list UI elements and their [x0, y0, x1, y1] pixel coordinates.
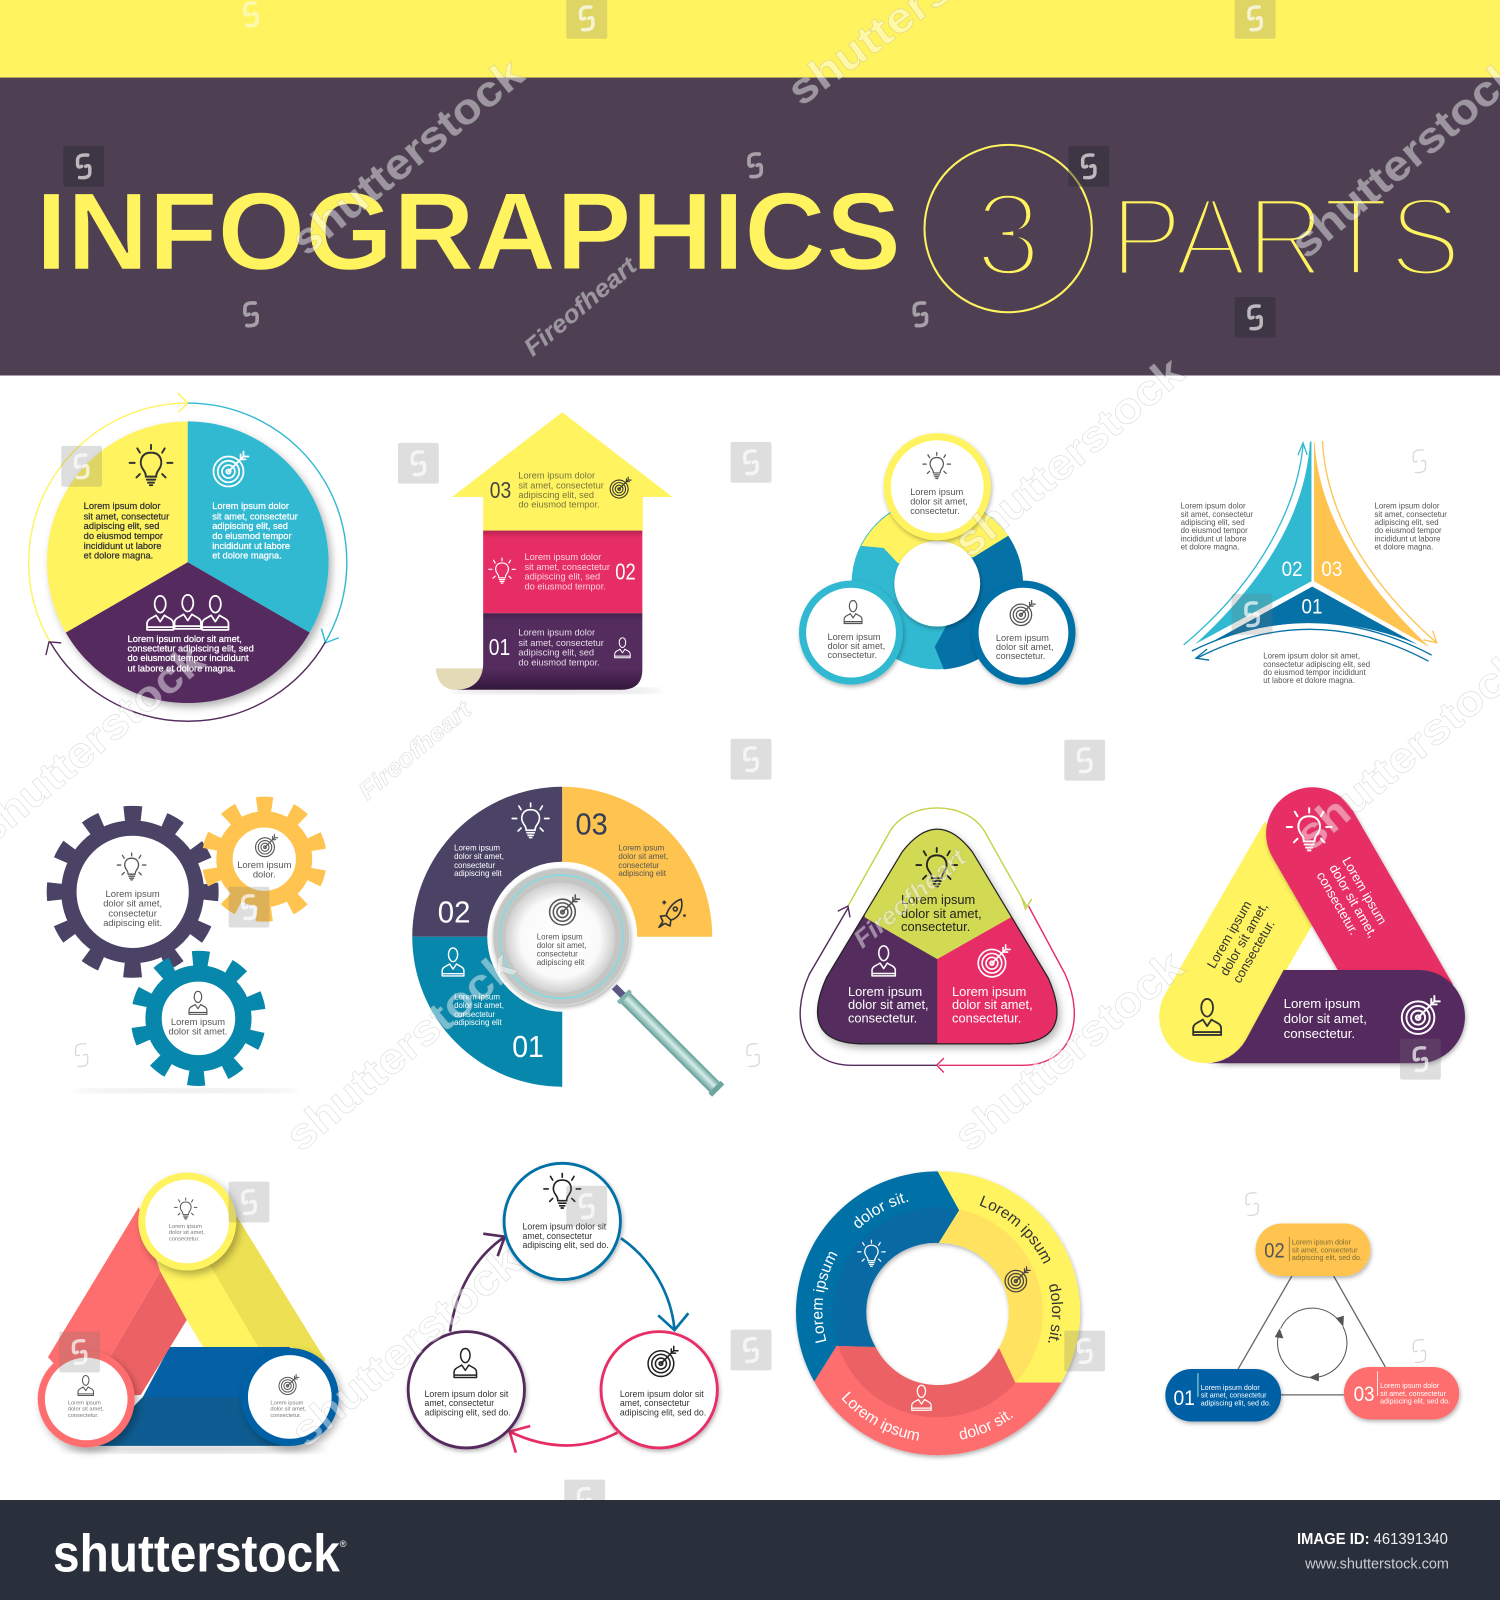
icon: bulb — [923, 453, 951, 478]
panel: cycle of outlined circles — [408, 1163, 717, 1453]
circle: purple: amet, consectetur — [424, 1398, 494, 1408]
text: red: Lorem ipsum — [952, 984, 1026, 999]
outer arrows — [800, 808, 1074, 1072]
text: segment 03: adipiscing elit, sed — [518, 490, 594, 500]
image id: IMAGE ID: 461391340 — [1297, 1531, 1448, 1548]
text: segment 02: sit amet, consectetur — [524, 562, 610, 572]
number 03: 03 — [490, 477, 511, 503]
text: purple: Lorem ipsum — [848, 984, 922, 999]
inner darker band — [834, 1208, 1043, 1418]
text: right: incididunt ut labore — [1374, 534, 1441, 543]
number 02: 02 — [615, 559, 636, 585]
number 01: 01 — [512, 1030, 544, 1064]
ring segments — [852, 498, 1023, 669]
curved labels: Lorem ipsum — [813, 1252, 838, 1344]
icon: person — [442, 948, 464, 976]
gear: dark: adipiscing elit. — [103, 918, 162, 928]
text: segment 02: Lorem ipsum dolor — [524, 552, 601, 562]
text: lens: adipiscing elit — [537, 958, 585, 967]
arrow: blue — [621, 1238, 688, 1330]
cycle arrows — [1276, 1308, 1347, 1381]
pill 02: sit amet, consectetur — [1292, 1247, 1358, 1255]
curved labels: Lorem ipsum — [842, 1392, 919, 1441]
panel: paper arrow — [436, 412, 672, 694]
pill 03: sit amet, consectetur — [1380, 1390, 1446, 1398]
icon: person — [872, 946, 895, 976]
panel: three-point star — [1181, 441, 1447, 685]
band: red — [1266, 787, 1453, 985]
text: yellow slice: et dolore magna. — [84, 551, 153, 561]
circle: purple: adipiscing elit, sed do. — [424, 1407, 511, 1417]
yellow top band — [0, 0, 1500, 78]
text: purple slice: ut labore et dolore magna. — [128, 663, 236, 673]
text: left: et dolore magna. — [1181, 542, 1239, 551]
text: segment 02: adipiscing elit, sed — [524, 572, 600, 582]
text: cyan slice: adipiscing elit, sed — [212, 521, 288, 531]
text: teal quadrant: adipiscing elit — [454, 1018, 503, 1027]
circle: top: consectetur. — [169, 1236, 200, 1242]
circle: purple — [408, 1332, 524, 1448]
text: segment 03: Lorem ipsum dolor — [518, 471, 595, 481]
gear: dark: Lorem ipsum — [106, 889, 160, 899]
icon: person — [454, 1348, 477, 1377]
icon: bulb — [512, 803, 549, 838]
text: cyan slice: incididunt ut labore — [212, 541, 290, 551]
text: cyan slice: et dolore magna. — [212, 551, 282, 561]
gear: dark: consectetur — [108, 908, 157, 918]
text: yellow band: consectetur. — [1230, 917, 1278, 986]
handle — [608, 981, 724, 1097]
text: segment 01: adipiscing elit, sed — [518, 648, 594, 658]
circle: blue: Lorem ipsum — [996, 633, 1049, 643]
text: purple band: dolor sit amet, — [1284, 1011, 1367, 1026]
icon: person — [78, 1376, 93, 1396]
circle: left: consectetur. — [68, 1413, 99, 1419]
icon: target — [978, 945, 1010, 977]
text: red: consectetur. — [952, 1010, 1021, 1025]
text: green: consectetur. — [901, 919, 970, 934]
connector lines — [1238, 1276, 1385, 1395]
circle: red: amet, consectetur — [620, 1398, 690, 1408]
panel: gears — [54, 790, 334, 1096]
text: cyan slice: Lorem ipsum dolor — [212, 501, 289, 511]
lens — [493, 868, 630, 1005]
text: left: adipiscing elit, sed — [1181, 518, 1245, 527]
curved labels — [813, 1193, 1064, 1441]
icon: bulb — [130, 445, 172, 485]
gear: teal: dolor sit amet. — [169, 1027, 227, 1037]
text: purple slice: do eiusmod tempor incididunt — [128, 653, 249, 663]
star segments — [1190, 441, 1435, 653]
panel: pie chart with circular arrows — [29, 393, 347, 721]
panel: linked band triangle — [1159, 787, 1465, 1063]
circle: red: adipiscing elit, sed do. — [620, 1407, 706, 1417]
icon: target — [1010, 601, 1035, 626]
segment 02 — [483, 531, 642, 613]
stock watermark text: Fireofheart — [519, 252, 643, 362]
text: purple slice: Lorem ipsum dolor sit amet, — [128, 634, 242, 644]
website: www.shutterstock.com — [1304, 1556, 1449, 1572]
circle: yellow — [887, 437, 987, 537]
text: teal quadrant: Lorem ipsum — [454, 992, 500, 1001]
stock watermark text: shutterstock — [282, 1237, 530, 1457]
circle: blue — [975, 584, 1072, 681]
pill 02: adipiscing elit, sed do. — [1292, 1254, 1362, 1262]
circle: blue: amet, consectetur — [522, 1231, 592, 1241]
icon: target — [1402, 996, 1440, 1034]
gear: teal: Lorem ipsum — [171, 1017, 225, 1027]
icon: bulb — [117, 853, 146, 880]
circle: blue: Lorem ipsum dolor sit — [522, 1222, 607, 1232]
icon: bulb — [489, 558, 515, 583]
icon: bulb — [858, 1240, 885, 1266]
text: left: incididunt ut labore — [1181, 534, 1247, 543]
circle: left: dolor sit amet, — [68, 1407, 104, 1413]
text: dark quadrant: dolor sit amet, — [454, 852, 504, 861]
paper curl — [436, 668, 483, 690]
text: yellow slice: sit amet, consectetur — [84, 511, 169, 521]
circle: cyan: dolor sit amet, — [828, 641, 885, 651]
text: right: adipiscing elit, sed — [1374, 518, 1439, 527]
text: right: et dolore magna. — [1374, 542, 1433, 551]
text: right: Lorem ipsum dolor — [1374, 502, 1440, 511]
text: teal quadrant: dolor sit amet, — [454, 1001, 504, 1010]
circle: yellow: Lorem ipsum — [910, 487, 964, 497]
circle: top: Lorem ipsum — [169, 1224, 202, 1230]
icon: target — [279, 1374, 299, 1394]
pill 03: adipiscing elit, sed do. — [1380, 1398, 1450, 1406]
text: orange quadrant: adipiscing elit — [618, 869, 667, 878]
text: purple: consectetur. — [848, 1010, 917, 1025]
text: bottom: consectetur adipiscing elit, sed — [1263, 660, 1370, 669]
pill 02: Lorem ipsum dolor — [1292, 1238, 1351, 1246]
text: orange quadrant: Lorem ipsum — [618, 844, 665, 853]
circle: cyan — [803, 584, 899, 681]
circle: top: dolor sit amet, — [169, 1230, 205, 1236]
text: segment 03: sit amet, consectetur — [518, 480, 604, 490]
text: segment 01: Lorem ipsum dolor — [518, 628, 595, 638]
text: yellow band: dolor sit amet, — [1217, 900, 1271, 978]
text: right: sit amet, consectetur — [1374, 510, 1447, 519]
text: yellow slice: do eiusmod tempor — [84, 531, 163, 541]
circle: left: Lorem ipsum — [68, 1401, 101, 1407]
circle: top — [142, 1176, 233, 1267]
donut segments — [796, 1171, 1080, 1455]
text: yellow band: Lorem ipsum — [1204, 898, 1255, 971]
text: right: do eiusmod tempor — [1374, 526, 1442, 535]
ground shadow — [449, 688, 663, 694]
band: blue — [96, 1347, 290, 1446]
number 01: 01 — [489, 634, 510, 660]
pill 01 — [1165, 1369, 1281, 1422]
numbers: 01 — [1302, 594, 1322, 618]
stock watermark text: shutterstock — [945, 348, 1193, 567]
circle: right: dolor sit amet, — [270, 1407, 307, 1413]
text: purple band: Lorem ipsum — [1284, 996, 1360, 1011]
stock watermark text: shutterstock — [945, 941, 1193, 1161]
curved labels: dolor sit. — [854, 1193, 908, 1228]
footer logo: shutterstock — [53, 1524, 340, 1583]
header banner — [0, 78, 1500, 376]
text: dark quadrant: Lorem ipsum — [454, 844, 500, 853]
text: bottom: do eiusmod tempor incididunt — [1263, 668, 1367, 677]
text: left: do eiusmod tempor — [1181, 526, 1248, 535]
ground shadow — [71, 1089, 300, 1093]
icon: person — [912, 1385, 931, 1410]
numbers: 02 — [1282, 557, 1303, 581]
arrows — [1184, 441, 1437, 661]
text: orange quadrant: dolor sit amet, — [618, 852, 668, 861]
text: bottom: ut labore et dolore magna. — [1263, 676, 1355, 685]
text: dark quadrant: adipiscing elit — [454, 869, 503, 878]
pill 01: adipiscing elit, sed do. — [1201, 1400, 1271, 1408]
text: purple slice: consectetur adipiscing elit, sed — [128, 644, 254, 654]
icon: people — [147, 595, 228, 630]
arrow head segment 03 — [452, 412, 672, 531]
pill 01: 01 — [1173, 1386, 1195, 1410]
circle: red — [601, 1332, 717, 1448]
text: purple band: consectetur. — [1284, 1026, 1355, 1041]
panel: magnifier pie — [412, 787, 724, 1097]
pill 02: 02 — [1264, 1239, 1285, 1263]
icon: person — [1193, 999, 1221, 1035]
text: lens: Lorem ipsum — [537, 932, 583, 941]
circle: right: consectetur. — [270, 1413, 302, 1419]
gear: orange: dolor. — [253, 870, 276, 880]
icon: target — [256, 835, 278, 857]
pill 02 — [1256, 1223, 1370, 1276]
pill 01: Lorem ipsum dolor — [1201, 1384, 1260, 1392]
panel: three pills with cycle — [1165, 1223, 1459, 1422]
text: segment 01: do eiusmod tempor. — [518, 657, 600, 667]
gear: dark — [54, 813, 211, 970]
curved labels: dolor sit. — [960, 1411, 1014, 1440]
pill 01: sit amet, consectetur — [1201, 1391, 1267, 1399]
numbers: 03 — [1321, 557, 1342, 581]
title: PARTS: PARTS — [1110, 174, 1461, 300]
circle: blue: consectetur. — [996, 651, 1045, 661]
circled number 3: 3 — [975, 170, 1041, 302]
text: green: dolor sit amet, — [901, 906, 982, 921]
panel: ring with three circles — [803, 437, 1072, 681]
circle: cyan: Lorem ipsum — [828, 632, 881, 642]
circle: blue — [504, 1163, 620, 1280]
circle: blue: adipiscing elit, sed do. — [522, 1240, 609, 1250]
registered mark: ® — [340, 1539, 347, 1549]
text: left: Lorem ipsum dolor — [1181, 502, 1246, 511]
band: yellow — [1159, 821, 1321, 1063]
text: cyan slice: sit amet, consectetur — [212, 511, 298, 521]
text: left: sit amet, consectetur — [1181, 510, 1253, 519]
text: yellow slice: Lorem ipsum dolor — [84, 501, 160, 511]
circle: right — [244, 1352, 335, 1442]
icon: person — [189, 991, 207, 1014]
icon: target — [550, 895, 580, 925]
text: cyan slice: do eiusmod tempor — [212, 531, 292, 541]
icon: target — [213, 452, 248, 487]
text: red band: Lorem ipsum — [1339, 854, 1390, 927]
icon: bulb — [544, 1173, 581, 1208]
icon: bulb — [1287, 808, 1332, 850]
icon: target — [648, 1346, 678, 1376]
triangle segments — [816, 828, 1064, 1052]
panel: 3D triangle with cylinders — [41, 1176, 335, 1453]
gear: orange: Lorem ipsum — [237, 860, 292, 870]
text: segment 02: do eiusmod tempor. — [524, 581, 606, 591]
text: lens: dolor sit amet, — [537, 941, 587, 950]
curved labels: Lorem ipsum — [980, 1196, 1050, 1264]
text: teal quadrant: consectetur — [454, 1010, 495, 1019]
text: red: dolor sit amet, — [952, 997, 1033, 1012]
stock watermark text: Fireofheart — [354, 696, 477, 806]
text: green: Lorem ipsum — [901, 892, 975, 907]
circle: yellow: dolor sit amet, — [910, 497, 968, 507]
number 02: 02 — [438, 895, 470, 929]
text: bottom: Lorem ipsum dolor sit amet, — [1263, 652, 1360, 661]
quadrants — [412, 787, 712, 1087]
panel: segmented donut — [794, 1171, 1084, 1460]
panel: rounded triangle — [796, 806, 1074, 1072]
band: yellow — [153, 1216, 326, 1388]
text: red band: consectetur. — [1314, 869, 1362, 937]
text: yellow slice: adipiscing elit, sed — [84, 521, 159, 531]
circle: yellow: consectetur. — [910, 506, 960, 516]
circled number 3 — [924, 145, 1092, 312]
gear: dark: dolor sit amet, — [103, 899, 162, 909]
icon: person — [615, 638, 630, 658]
pie slices — [47, 421, 329, 703]
text: red band: dolor sit amet, — [1326, 862, 1380, 940]
text: lens: consectetur — [537, 950, 578, 959]
gear: teal — [121, 941, 276, 1096]
pill 03: Lorem ipsum dolor — [1380, 1382, 1440, 1390]
circle: purple: Lorem ipsum dolor sit — [424, 1389, 509, 1399]
segment 01 — [456, 613, 642, 690]
band: coral — [48, 1207, 187, 1399]
stock watermark text: Fireofheart — [849, 844, 972, 954]
circle: red: Lorem ipsum dolor sit — [620, 1389, 704, 1399]
icon: bulb — [916, 848, 957, 886]
pill 03 — [1344, 1367, 1459, 1419]
circle: blue: dolor sit amet, — [996, 642, 1054, 652]
text: dark quadrant: consectetur — [454, 861, 495, 870]
icon: target — [1005, 1267, 1030, 1292]
text: segment 01: sit amet, consectetur — [518, 638, 604, 648]
curved labels: dolor sit. — [1048, 1284, 1064, 1342]
text: yellow slice: incididunt ut labore — [84, 541, 161, 551]
pill 03: 03 — [1354, 1382, 1374, 1406]
icon: bulb — [174, 1198, 197, 1219]
circle: right: Lorem ipsum — [270, 1401, 304, 1407]
stock watermark text: shutterstock — [282, 49, 533, 265]
text: purple: dolor sit amet, — [848, 997, 929, 1012]
footer bar — [0, 1500, 1500, 1600]
text: orange quadrant: consectetur — [618, 861, 660, 870]
ground shadow — [61, 1445, 327, 1453]
icon: target — [610, 477, 631, 498]
title: INFOGRAPHICS: INFOGRAPHICS — [36, 170, 901, 293]
band: purple — [1206, 970, 1465, 1063]
circular arrows — [29, 393, 347, 721]
arrow: purple — [450, 1234, 505, 1332]
arrow: red — [510, 1426, 617, 1453]
icon: person — [844, 601, 862, 624]
stock watermark text: shutterstock — [277, 941, 525, 1161]
number 03: 03 — [576, 808, 608, 842]
icon: rocket — [659, 899, 686, 927]
numbers — [1282, 557, 1342, 618]
gear: orange — [195, 790, 334, 929]
text: segment 03: do eiusmod tempor. — [518, 500, 600, 510]
circle: cyan: consectetur. — [828, 650, 877, 660]
circle: left — [41, 1354, 131, 1444]
